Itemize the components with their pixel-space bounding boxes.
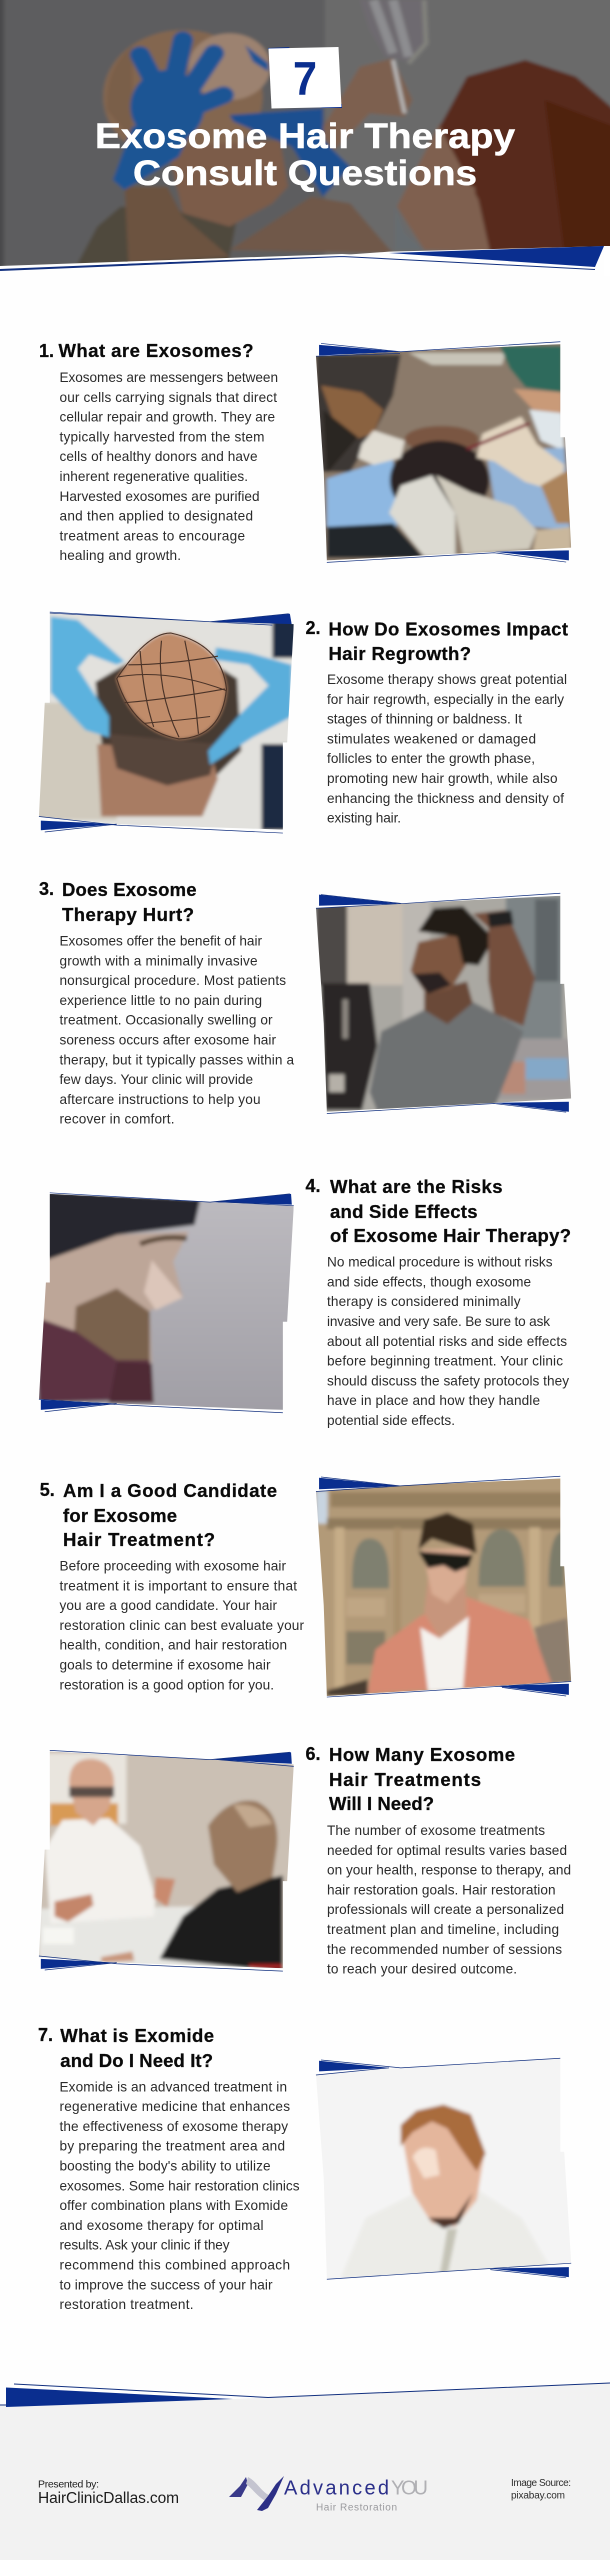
text block: question 2: for hair regrowth, especially in the early [327, 692, 564, 707]
text block: question 1: cells of healthy donors and have [60, 449, 258, 464]
text block: question 5: treatment it is important to ensure that [60, 1578, 297, 1593]
text block: question 7: Exomide is an advanced treatment in [60, 2079, 287, 2094]
heading: question 4: What are the Risks [330, 1176, 502, 1197]
logo icon: swoosh [229, 2476, 284, 2511]
text block: question 4: invasive and very safe. Be sure to ask [327, 1314, 550, 1329]
footer blue wedge [6, 2388, 233, 2407]
text block: question 7: and exosome therapy for optimal [60, 2218, 264, 2233]
text block: question 3: treatment. Occasionally swelling or [60, 1013, 273, 1028]
text block: question 1: treatment areas to encourage [60, 528, 245, 543]
panel: question 2 [35, 610, 568, 834]
text block: question 7: by preparing the treatment area and [60, 2139, 285, 2154]
heading: question 2: 2. [306, 618, 321, 638]
heading: question 4: 4. [306, 1176, 321, 1196]
text block: question 6: treatment plan and timeline, including [327, 1922, 559, 1937]
heading: question 2 [306, 618, 568, 664]
heading: question 6 [306, 1744, 515, 1814]
text block: question 4: before beginning treatment. Your clinic [327, 1354, 563, 1369]
panel: question 3 [39, 879, 576, 1127]
text block: question 3: recover in comfort. [60, 1112, 174, 1127]
photo: man in sunglasses [311, 1476, 576, 1702]
text block: question 6: the recommended number of sessions [327, 1942, 562, 1957]
text block: question 6: to reach your desired outcome. [327, 1962, 517, 1977]
heading: question 2: Hair Regrowth? [328, 643, 471, 664]
text block: question 1 [60, 370, 278, 563]
heading: question 5: Hair Treatment? [63, 1529, 215, 1550]
photo: hair transplant procedure [311, 341, 576, 565]
text block: question 5: restoration clinic can best evaluate your [60, 1618, 304, 1633]
image source: Image Source: [511, 2478, 571, 2489]
text block: question 6: The number of exosome treatments [327, 1823, 545, 1838]
text block: question 5 [60, 1558, 304, 1692]
presented by: HairClinicDallas.com [38, 2490, 179, 2507]
text block: question 5: health, condition, and hair restoration [60, 1638, 287, 1653]
heading: question 4: of Exosome Hair Therapy? [330, 1225, 571, 1246]
heading: question 5: Am I a Good Candidate [63, 1480, 277, 1501]
text block: question 6: on your health, response to therapy, and [327, 1863, 571, 1878]
text block: question 3: therapy, but it typically passes within a [60, 1052, 294, 1067]
heading: question 6: 6. [306, 1744, 321, 1764]
heading: question 3 [39, 879, 196, 925]
photo: consultation with doctor [35, 1748, 300, 1974]
text block: question 6: needed for optimal results varies based [327, 1843, 567, 1858]
white edge of header [0, 255, 595, 268]
heading: question 7 [38, 2025, 214, 2071]
text block: question 7: exosomes. Some hair restoration clinics [60, 2178, 300, 2193]
text block: question 3: few days. Your clinic will provide [60, 1072, 253, 1087]
photo: scalp with grid markings [35, 610, 300, 834]
heading: question 3: Does Exosome [62, 879, 196, 900]
text block: question 7: results. Ask your clinic if they [60, 2238, 230, 2253]
footer rule [0, 2383, 610, 2405]
text block: question 7: boosting the body's ability to utilize [60, 2158, 270, 2174]
heading: question 3: Therapy Hurt? [62, 904, 194, 925]
number badge [268, 47, 342, 108]
text block: question 5: Before proceeding with exosome hair [60, 1558, 286, 1574]
heading: question 6: How Many Exosome [329, 1744, 515, 1765]
text block: question 1: typically harvested from the stem [60, 429, 264, 444]
text block: question 1: inherent regenerative qualities. [60, 469, 248, 484]
text block: question 2 [327, 672, 567, 826]
text block: question 2: promoting new hair growth, while also [327, 771, 558, 786]
text block: question 7: recommend this combined approach [60, 2258, 290, 2272]
image source [511, 2478, 571, 2502]
text block: question 3: Exosomes offer the benefit of hair [60, 934, 262, 948]
text block: question 3: aftercare instructions to help you [60, 1092, 260, 1107]
text block: question 6: hair restoration goals. Hair restoration [327, 1882, 556, 1897]
panel: question 6 [35, 1744, 571, 1977]
logo: AdvancedYOU Hair Restoration: YOU [391, 2478, 428, 2500]
logo: AdvancedYOU Hair Restoration: Hair Restoration [316, 2503, 397, 2514]
text block: question 2: enhancing the thickness and density of [327, 791, 564, 806]
text block: question 4: therapy is considered minimally [327, 1294, 521, 1309]
text block: question 3: growth with a minimally invasive [60, 953, 258, 968]
photo: man touching his hair [311, 892, 576, 1117]
text block: question 1: healing and growth. [60, 548, 181, 563]
text block: question 7: offer combination plans with Exomide [60, 2198, 288, 2213]
presented by: Presented by: [38, 2478, 99, 2490]
text block: question 5: goals to determine if exosome hair [60, 1658, 271, 1672]
text block: question 3: nonsurgical procedure. Most patients [60, 973, 286, 988]
heading: question 6: Will I Need? [329, 1793, 434, 1814]
logo: AdvancedYOU Hair Restoration [229, 2476, 428, 2514]
text block: question 2: existing hair. [327, 811, 401, 826]
text block: question 1: our cells carrying signals that direct [60, 390, 277, 405]
text block: question 7: the effectiveness of exosome therapy [60, 2119, 288, 2134]
text block: question 7 [60, 2079, 300, 2312]
text block: question 4: and side effects, though exosome [327, 1274, 531, 1289]
text block: question 1: Exosomes are messengers between [60, 370, 278, 385]
text block: question 4 [327, 1255, 569, 1428]
text block: question 7: regenerative medicine that enhances [60, 2099, 290, 2114]
text block: question 1: cellular repair and growth. They are [60, 410, 275, 425]
text block: question 5: you are a good candidate. Your hair [60, 1598, 277, 1613]
photo: bearded man in beanie [35, 1190, 300, 1415]
heading: question 6: Hair Treatments [329, 1769, 481, 1790]
left glove drawn with thick finger strokes [140, 40, 224, 110]
text block: question 2: Exosome therapy shows great potential [327, 672, 567, 687]
heading: question 3: 3. [39, 879, 54, 899]
text block: question 3: soreness occurs after exosome hair [60, 1032, 276, 1048]
text block: question 7: to improve the success of your hair [60, 2277, 273, 2292]
image source: pixabay.com [511, 2490, 565, 2502]
heading: question 5: 5. [40, 1480, 55, 1500]
heading: question 4: and Side Effects [330, 1201, 478, 1222]
number badge: 7 [293, 52, 317, 105]
heading: question 2: How Do Exosomes Impact [328, 618, 568, 640]
text block: question 4: should discuss the safety protocols they [327, 1373, 569, 1388]
text block: question 3 [60, 934, 294, 1127]
presented by [38, 2478, 179, 2507]
text block: question 2: stages of thinning or baldness. It [327, 712, 522, 727]
blue wedge [389, 246, 604, 267]
text block: question 1: and then applied to designated [60, 509, 253, 524]
heading: question 1: 1. [39, 341, 54, 361]
text block: question 6 [327, 1823, 571, 1977]
text block: question 5: restoration is a good option for you. [60, 1677, 274, 1692]
footer background [0, 2383, 610, 2560]
right white strip [604, 246, 610, 276]
title [95, 117, 516, 193]
text block: question 4: about all potential risks and side effects [327, 1334, 567, 1349]
heading: question 7: 7. [38, 2025, 53, 2045]
text block: question 4: have in place and how they handle [327, 1393, 540, 1408]
footer [0, 2383, 610, 2560]
dark line under header [0, 256, 595, 270]
text block: question 6: professionals will create a personalized [327, 1902, 564, 1917]
panel: question 1 [39, 340, 576, 565]
heading: question 7: What is Exomide [60, 2025, 214, 2046]
photo: man with thinning hair [311, 2057, 576, 2282]
text block: question 2: follicles to enter the growth phase, [327, 751, 535, 766]
text block: question 4: potential side effects. [327, 1413, 455, 1428]
text block: question 4: No medical procedure is without risks [327, 1255, 553, 1270]
heading: question 7: and Do I Need It? [60, 2050, 213, 2071]
heading: question 4 [306, 1176, 571, 1246]
title: Consult Questions [133, 154, 477, 193]
text block: question 2: stimulates weakened or damaged [327, 731, 536, 746]
heading: question 5 [40, 1480, 277, 1550]
text block: question 7: restoration treatment. [60, 2297, 194, 2312]
panel: question 5 [40, 1476, 576, 1702]
title: Exosome Hair Therapy [95, 117, 516, 156]
heading: question 1: What are Exosomes? [58, 340, 254, 361]
panel: question 4 [35, 1176, 571, 1428]
header banner [0, 0, 610, 280]
panel: question 7 [38, 2025, 576, 2312]
heading: question 5: for Exosome [63, 1505, 177, 1526]
text block: question 1: Harvested exosomes are purified [60, 489, 260, 504]
header photo: doctor examining scalp [0, 0, 610, 280]
text block: question 3: experience little to no pain during [60, 993, 262, 1008]
logo: AdvancedYOU Hair Restoration: Advanced [284, 2478, 389, 2500]
